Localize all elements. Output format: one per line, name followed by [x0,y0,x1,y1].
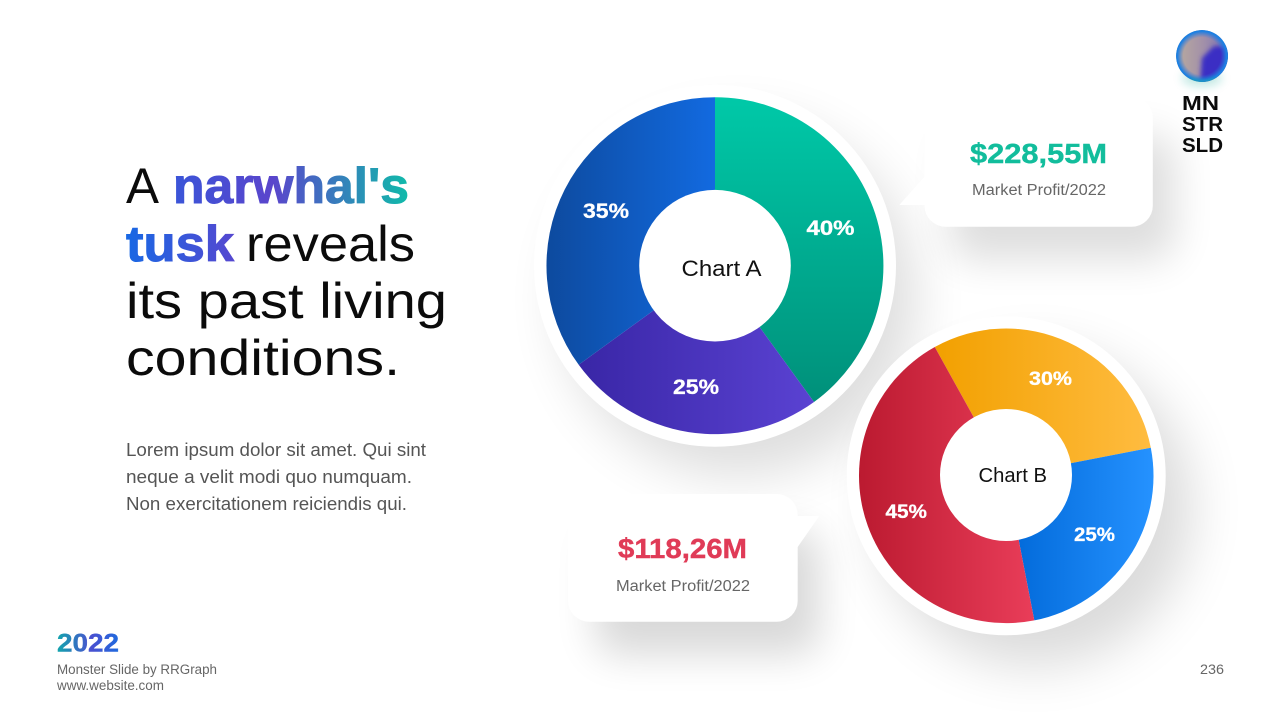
logo wordmark [1182,92,1223,157]
label: 35%: 35% [583,200,629,223]
label: 45%: 45% [886,502,927,523]
callout: Chart B value: Market Profit/2022 [616,578,750,595]
title [126,158,447,386]
page number: 236 [1200,662,1224,677]
title: tusk [126,216,234,272]
label: 30%: 30% [1029,369,1072,390]
title: narwhal's [173,158,409,214]
chart B: donut [847,316,1166,635]
callout: Chart B value: $118,26M [618,533,747,564]
body text: Non exercitationem reiciendis qui. [126,494,407,514]
callout A shadow [950,135,1175,260]
body text: Lorem ipsum dolor sit amet. Qui sint [126,440,426,460]
slice: 45% red [859,347,1034,623]
chart B hole [940,409,1072,541]
label: Chart A: Chart A [682,256,762,281]
footer: year and credits: www.website.com [56,678,164,693]
title: its past living [126,273,447,329]
logo wordmark: STR [1182,113,1223,136]
slice: 25% purple [579,266,814,434]
callout B shadow [595,530,820,655]
chart A white ring [534,85,896,447]
chart B shadow [876,350,1192,666]
body text [126,440,426,514]
footer: year and credits: Monster Slide by RRGraph [57,662,217,677]
slice: 40% teal [715,97,883,402]
callout: Chart A value: Market Profit/2022 [972,182,1106,199]
chart A: donut [534,85,896,447]
title: conditions. [126,330,400,386]
logo [1176,30,1230,157]
chart A shadow [560,120,916,476]
callout: Chart B value [568,494,819,622]
title: A [126,158,160,214]
label: Chart B: Chart B [978,465,1047,487]
icon: logo sphere [1176,30,1230,84]
footer: year and credits [56,630,217,693]
logo wordmark: SLD [1182,134,1223,157]
label: 40%: 40% [806,217,855,240]
chart B white ring [847,316,1166,635]
slice: 30% amber [935,329,1151,476]
callout: Chart A value [899,97,1153,227]
label: 25%: 25% [1074,525,1115,546]
icon: logo glow [1182,70,1222,86]
slice: 35% blue [546,97,715,365]
logo wordmark: MN [1182,92,1219,115]
footer: year and credits: 2022 [57,630,119,658]
label: 25%: 25% [673,376,719,399]
callout: Chart A value: $228,55M [970,138,1107,169]
body text: neque a velit modi quo numquam. [126,467,412,487]
chart A hole [639,190,791,342]
title: reveals [246,216,415,272]
slice: 25% blue [1006,448,1154,620]
